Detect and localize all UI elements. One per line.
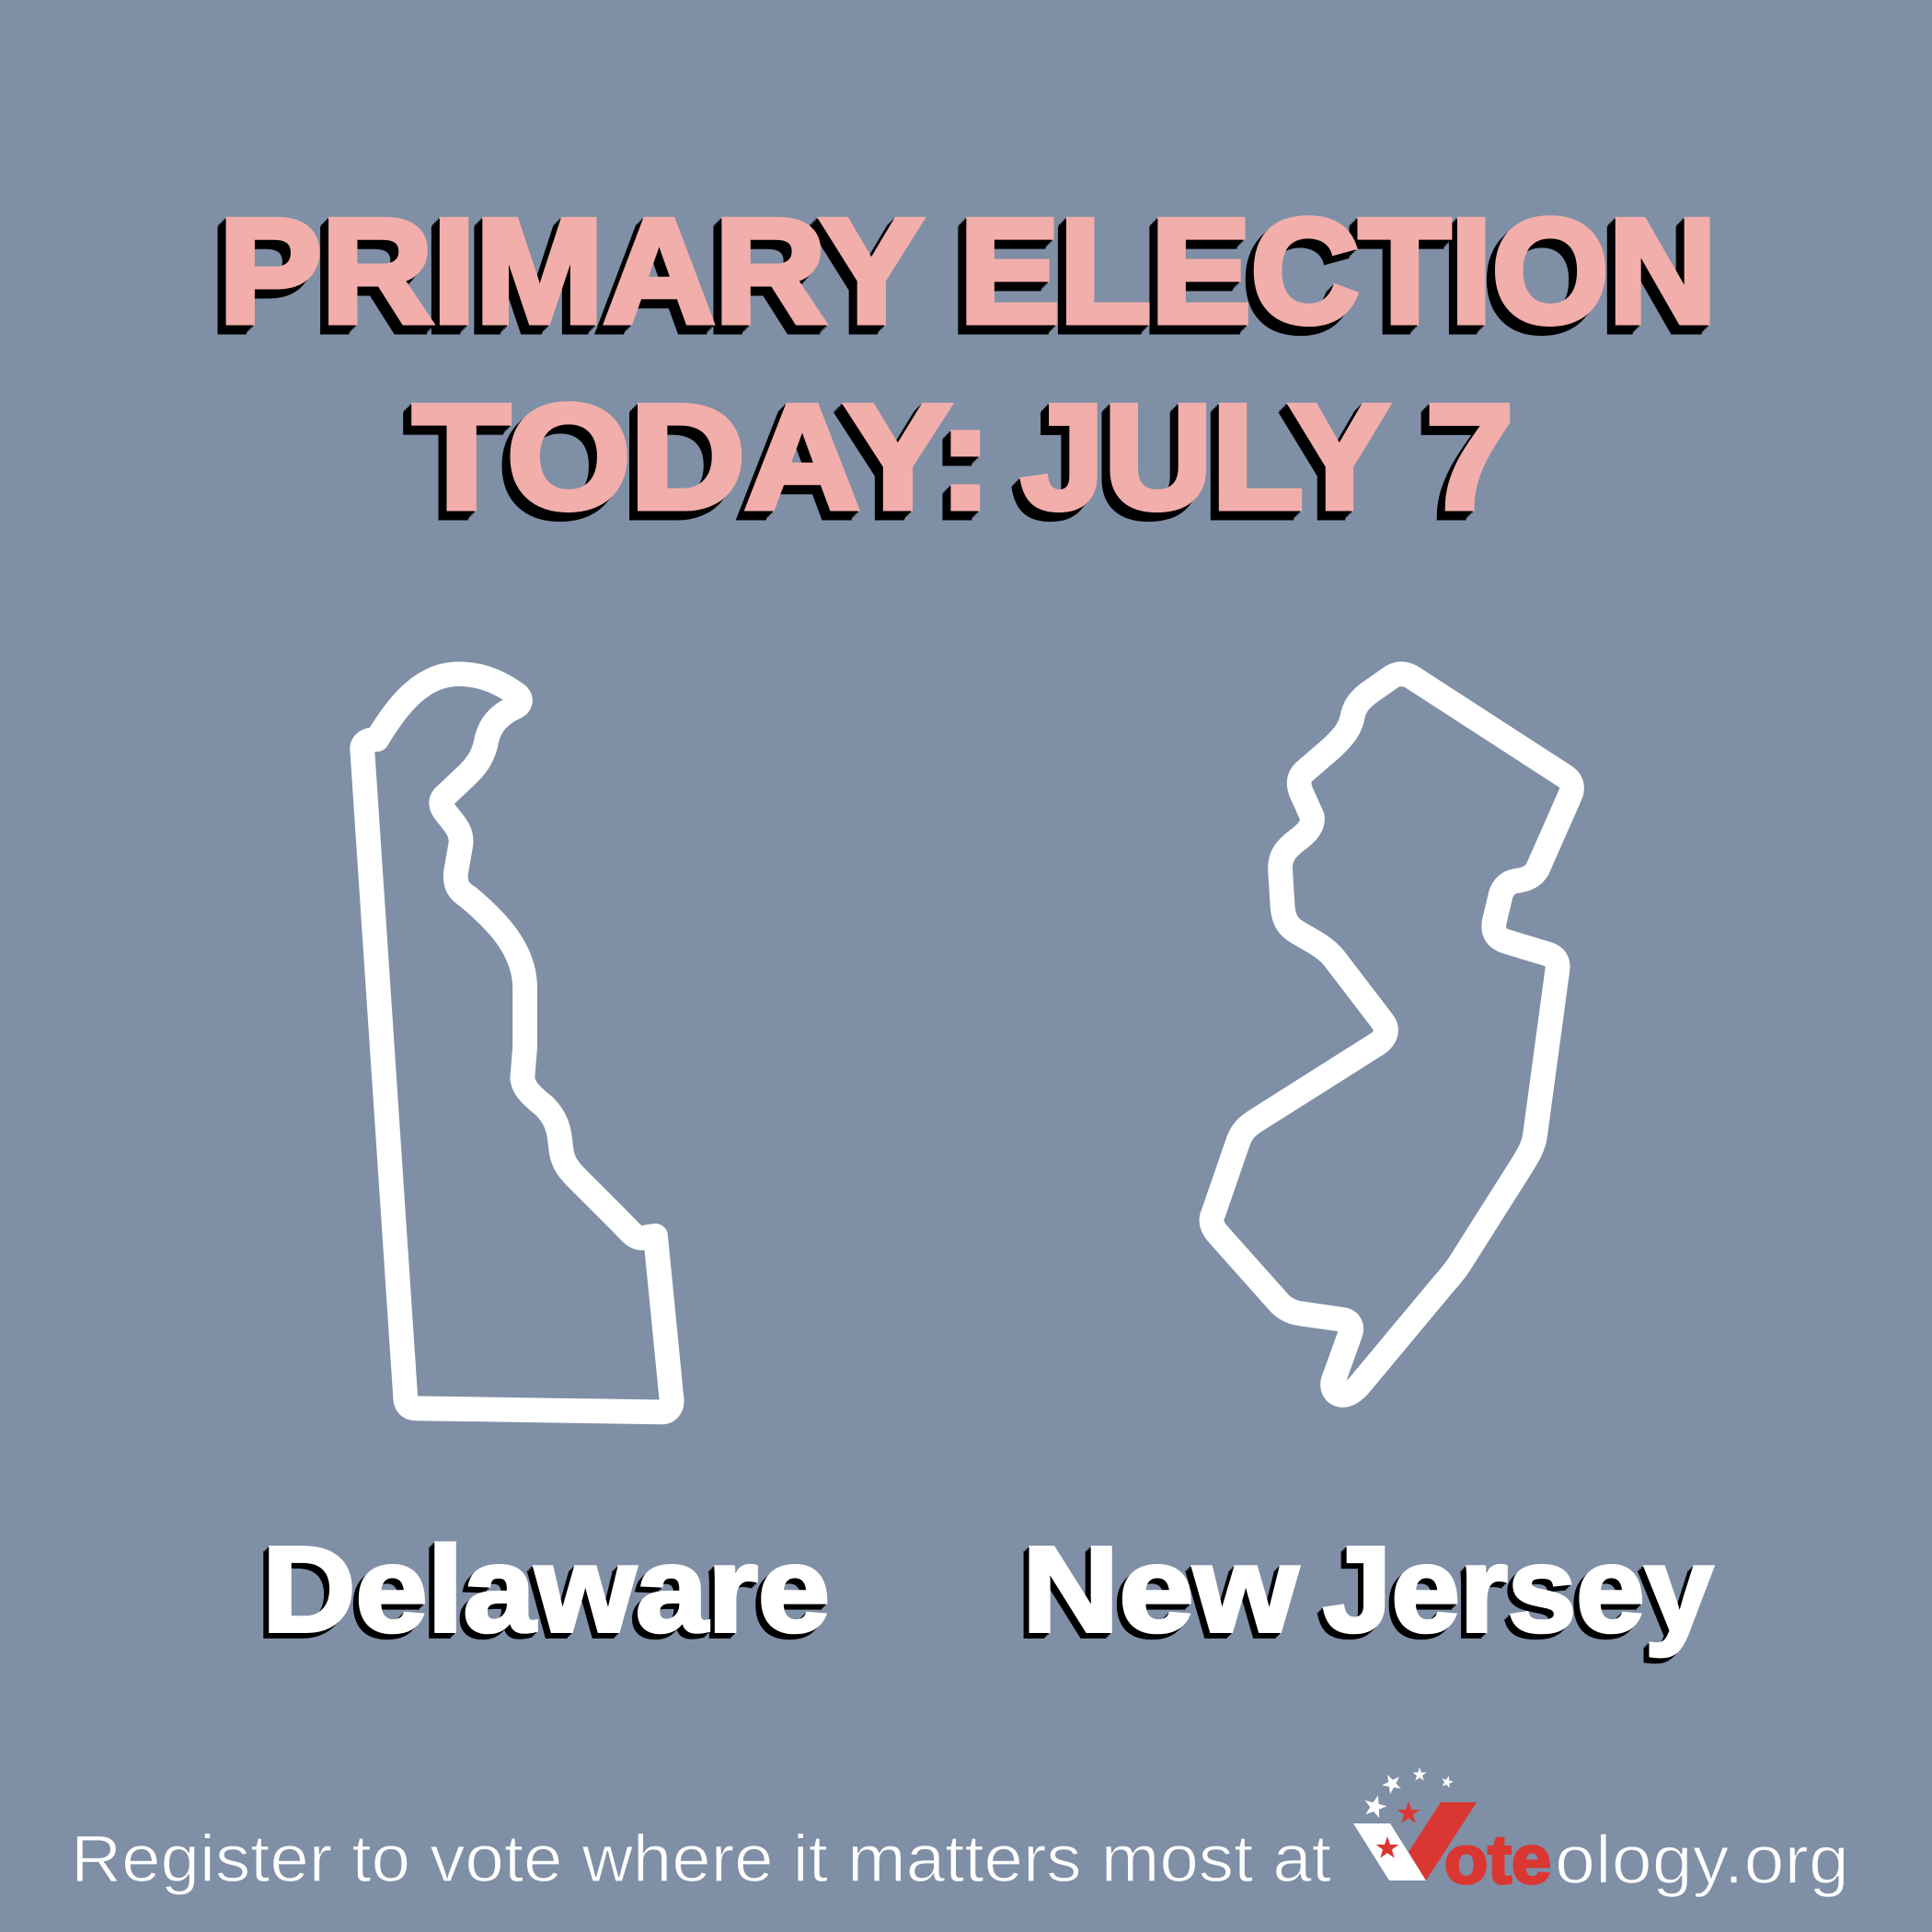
title: TODAY: [413, 374, 992, 540]
map: New Jersey outline [1212, 674, 1571, 1395]
logo check mark red [1409, 1802, 1477, 1880]
logo check mark white [1353, 1823, 1426, 1880]
label: New Jersey: Jersey [1323, 1522, 1713, 1657]
title: 7 [1426, 374, 1513, 540]
title: JULY [1021, 374, 1389, 540]
map: Delaware outline [362, 674, 672, 1412]
logo stars [1362, 1767, 1455, 1858]
label: New Jersey: New [1022, 1522, 1298, 1657]
title: PRIMARY [219, 189, 923, 354]
label: Delaware: Delaware [262, 1522, 830, 1657]
title [219, 189, 1717, 540]
title: ELECTION [960, 189, 1717, 354]
logo word: ote: ote [1444, 1822, 1551, 1898]
logo: Voteology [1353, 1767, 1849, 1898]
logo word: ology.org: ology.org [1555, 1822, 1849, 1898]
footer text: Register to vote where it matters most at [71, 1823, 1331, 1896]
label: New Jersey [1022, 1522, 1713, 1657]
